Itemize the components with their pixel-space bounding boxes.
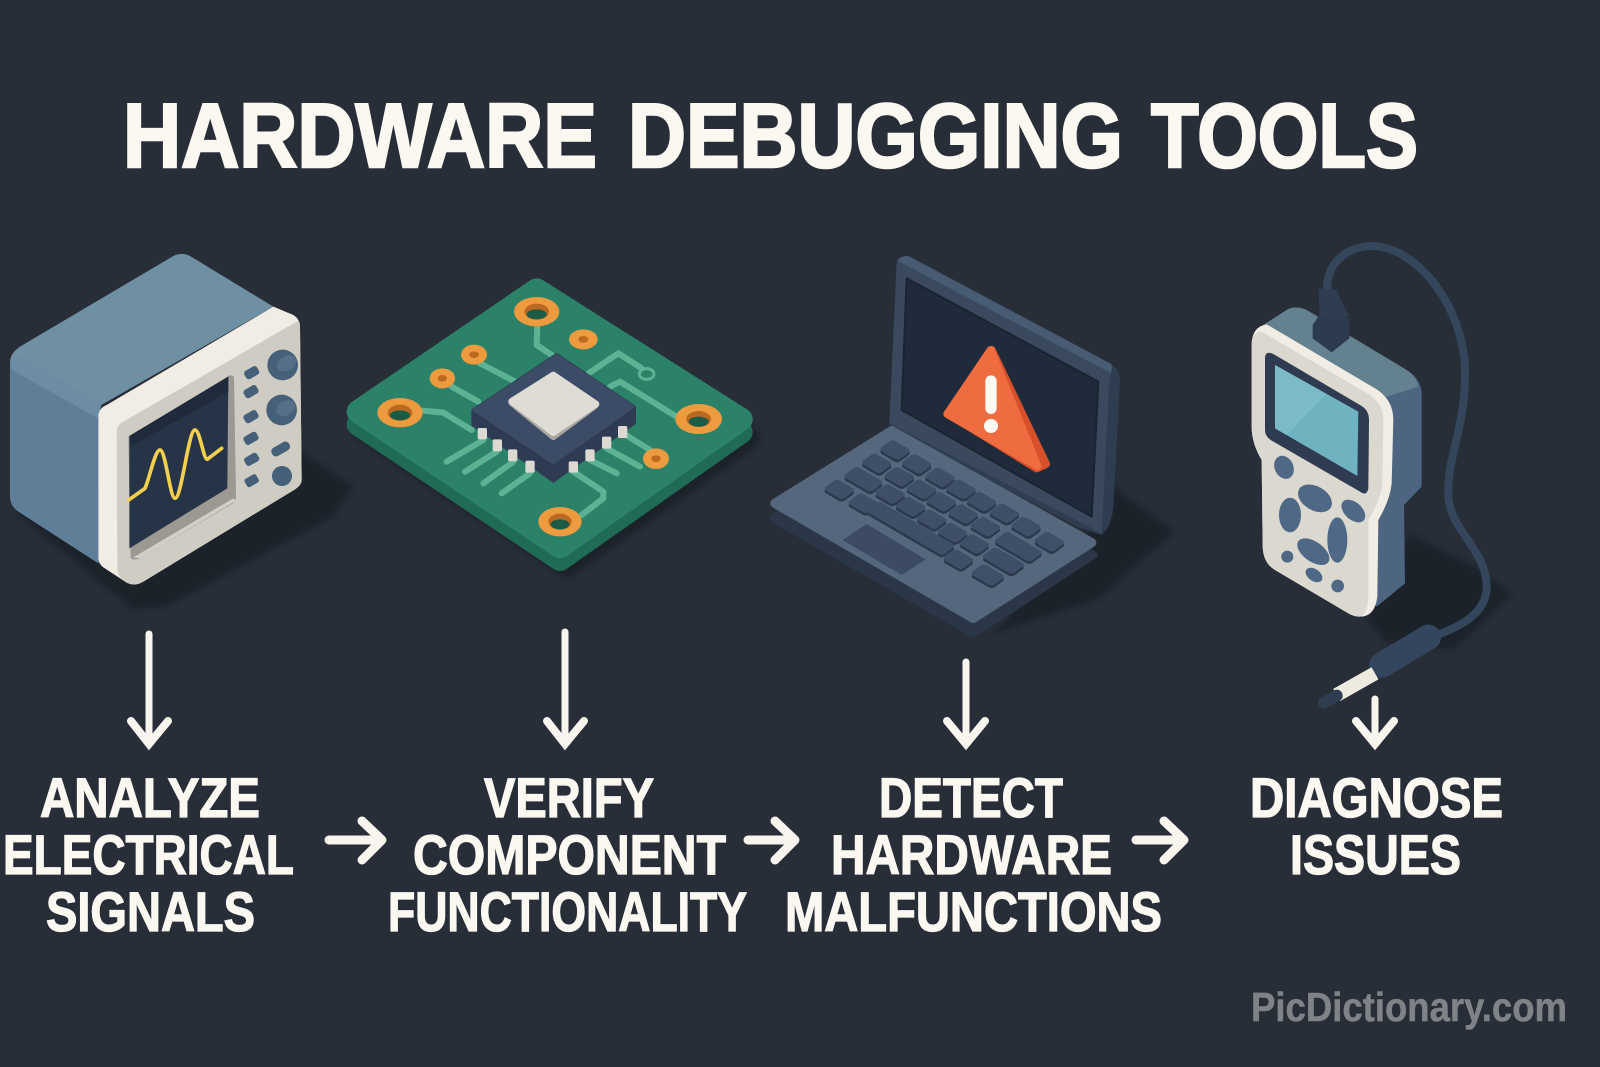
keypad buttons bbox=[1270, 453, 1370, 592]
device body bbox=[1263, 307, 1422, 607]
trackpad bbox=[843, 524, 926, 575]
arrow: circuit board down bbox=[547, 632, 584, 744]
label: verify component functionality: COMPONENT bbox=[413, 823, 726, 886]
label: analyze electrical signals bbox=[3, 766, 294, 943]
label: analyze electrical signals: ELECTRICAL bbox=[3, 823, 294, 886]
chip bbox=[472, 354, 635, 482]
label: verify component functionality: VERIFY bbox=[484, 766, 654, 829]
watermark: PicDictionary.com bbox=[1251, 984, 1567, 1030]
label: detect hardware malfunctions: DETECT bbox=[879, 766, 1063, 829]
pins bbox=[478, 426, 627, 473]
warning triangle bbox=[948, 350, 1046, 468]
screen bezel bbox=[1265, 353, 1369, 494]
label: detect hardware malfunctions: HARDWARE bbox=[831, 823, 1112, 886]
keyboard bbox=[825, 443, 1064, 588]
arrow: verify to detect bbox=[748, 821, 795, 860]
title: HARDWARE bbox=[123, 86, 597, 187]
label: diagnose issues bbox=[1250, 766, 1503, 886]
label: verify component functionality bbox=[388, 766, 747, 943]
cable bbox=[1327, 246, 1487, 635]
traces bbox=[423, 325, 677, 515]
arrow: analyze to verify bbox=[329, 821, 382, 860]
arrow: laptop down bbox=[947, 662, 985, 744]
label: verify component functionality: FUNCTIONALITY bbox=[388, 880, 747, 943]
icon: circuit board bbox=[358, 290, 748, 566]
laptop lid bbox=[889, 256, 1120, 535]
arrow: tester down bbox=[1356, 699, 1394, 744]
connector plug bbox=[1318, 288, 1348, 330]
icon: handheld tester with cable bbox=[1252, 246, 1512, 703]
arrow: oscilloscope down bbox=[131, 634, 168, 744]
icon: oscilloscope bbox=[10, 254, 353, 610]
icon: laptop with warning bbox=[773, 256, 1175, 633]
exclamation mark bbox=[985, 375, 997, 414]
label: detect hardware malfunctions bbox=[785, 766, 1162, 943]
laptop base bbox=[773, 440, 1093, 633]
control buttons bbox=[242, 350, 298, 488]
arrow: detect to diagnose bbox=[1136, 821, 1184, 860]
pads bbox=[377, 297, 722, 536]
label: analyze electrical signals: ANALYZE bbox=[40, 766, 260, 829]
label: detect hardware malfunctions: MALFUNCTIONS bbox=[785, 880, 1162, 943]
label: diagnose issues: DIAGNOSE bbox=[1250, 766, 1503, 829]
title: DEBUGGING bbox=[628, 86, 1123, 187]
waveform trace bbox=[129, 430, 222, 500]
title bbox=[123, 86, 1418, 187]
title: TOOLS bbox=[1151, 86, 1418, 187]
label: analyze electrical signals: SIGNALS bbox=[46, 880, 255, 943]
probe jack bbox=[1382, 637, 1428, 665]
label: diagnose issues: ISSUES bbox=[1290, 823, 1461, 886]
